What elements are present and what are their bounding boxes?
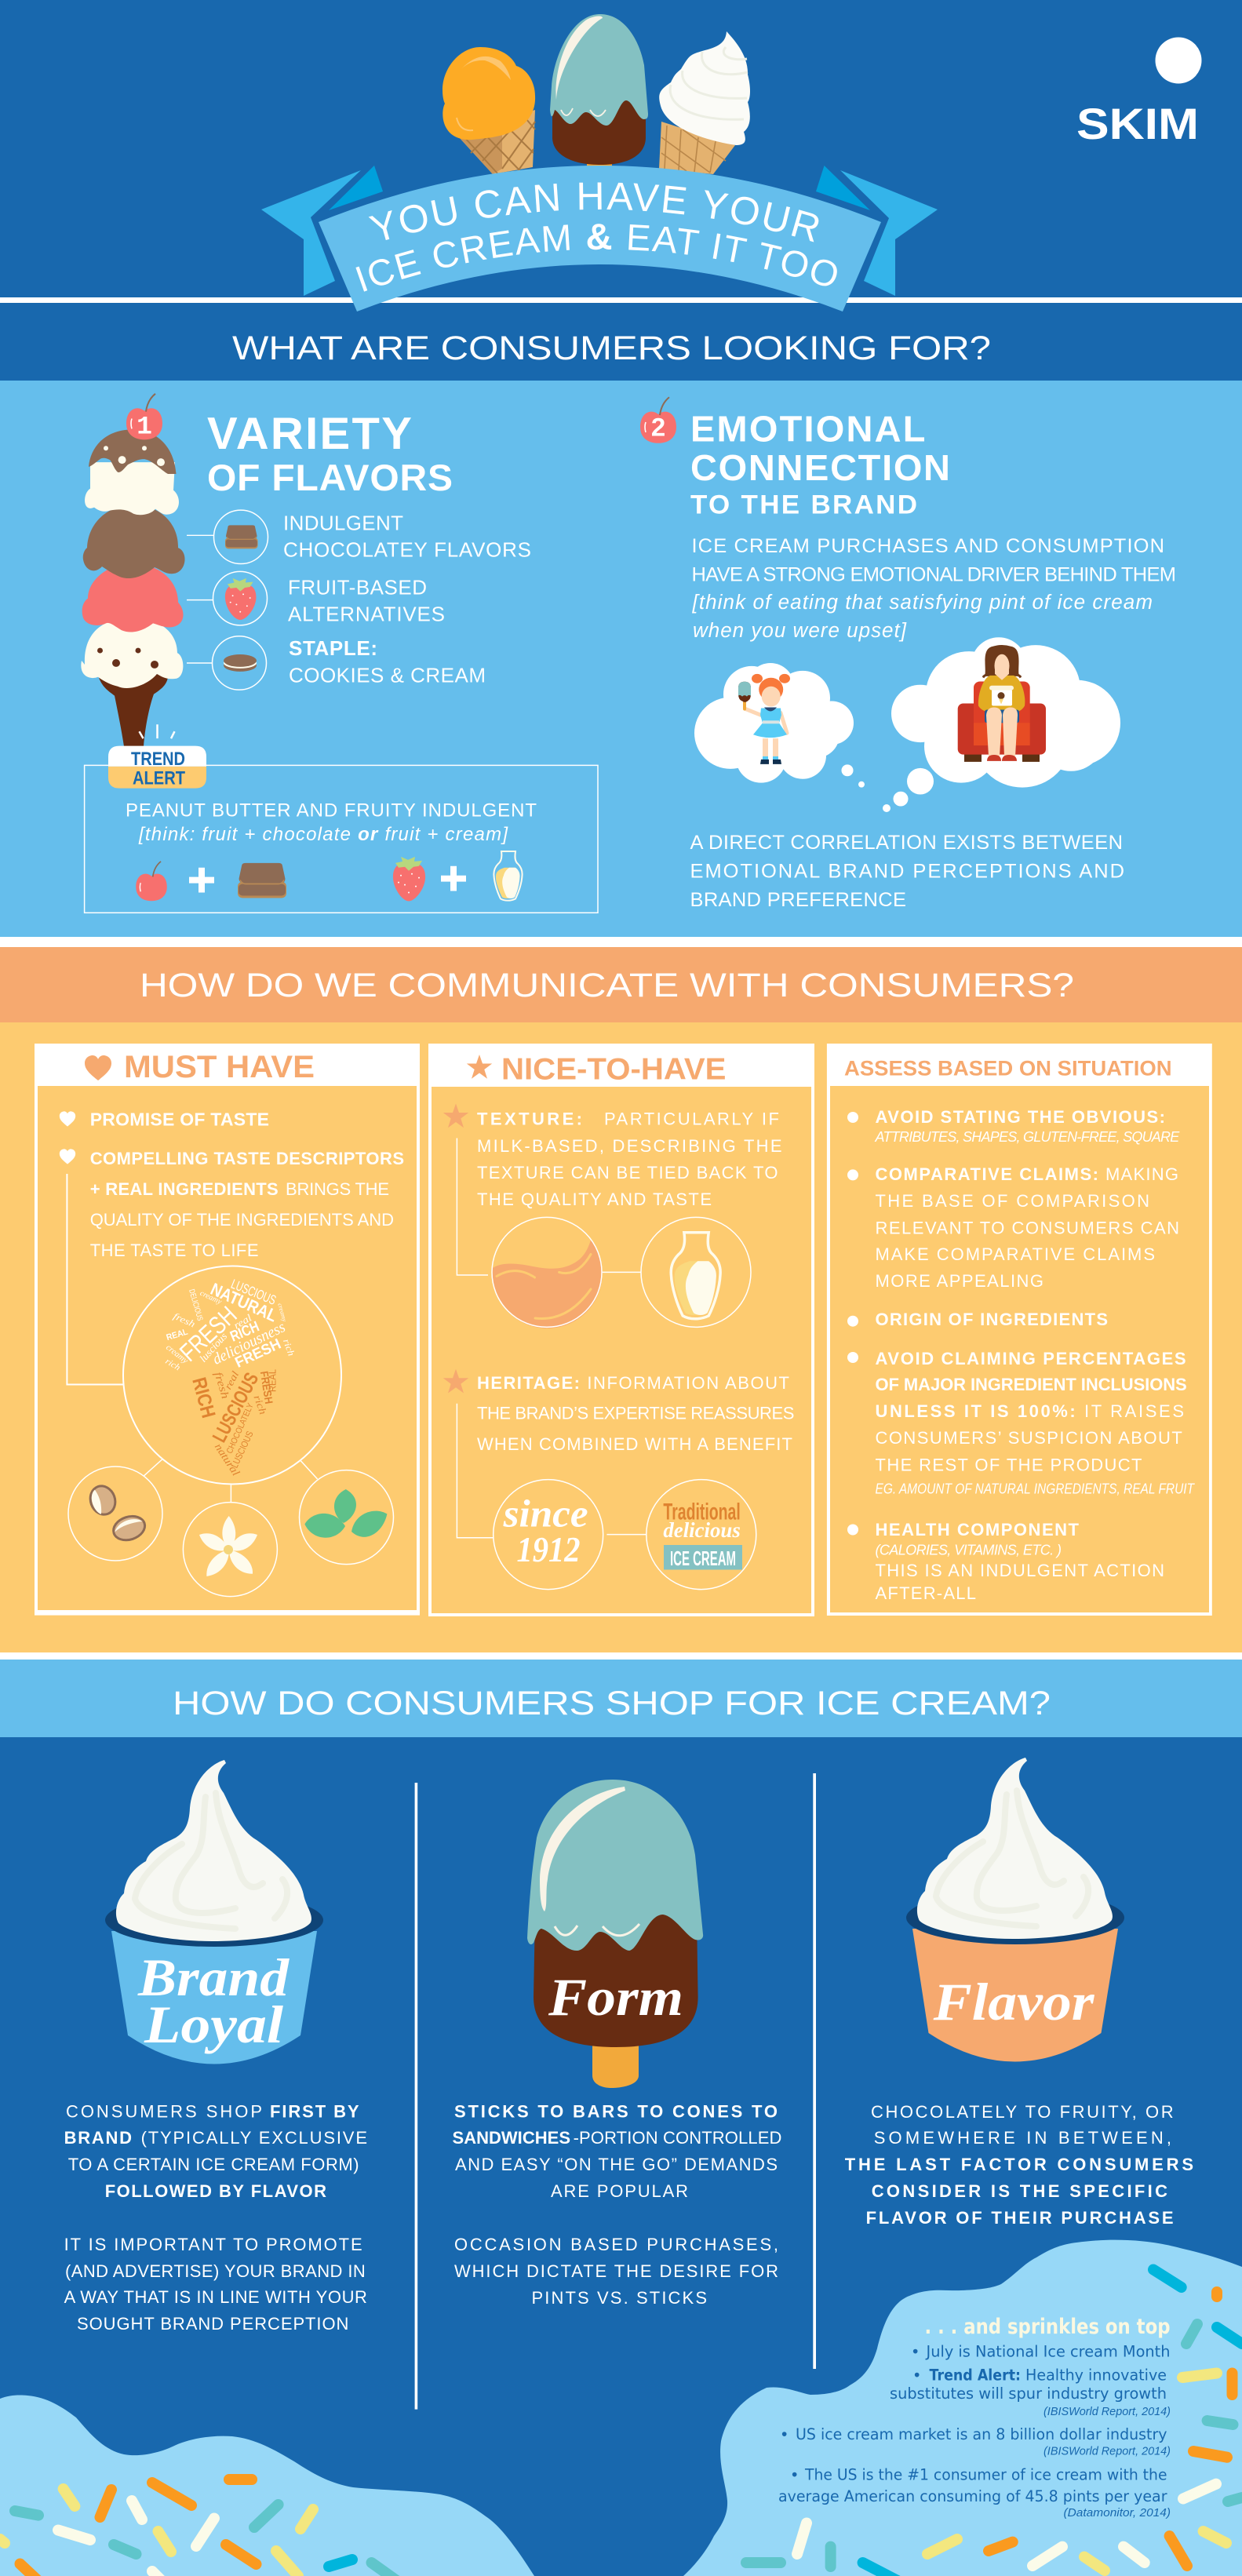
bullet list: taste promises: PROMISE OF TASTE	[90, 1109, 269, 1130]
word cloud cone: LUSCIOUS	[209, 1369, 263, 1446]
text block: texture: TEXTURE:	[477, 1109, 582, 1129]
bullet: health component: HEALTH COMPONENT	[876, 1520, 1080, 1539]
panel: must have	[35, 1044, 420, 1616]
text block: form	[452, 2101, 781, 2308]
item: fruit-based alternatives: FRUIT-BASED	[288, 578, 427, 599]
text block: form: PINTS VS. STICKS	[532, 2288, 707, 2308]
icon: mint leaves	[300, 1470, 394, 1565]
icon: flavor cup: Flavor	[933, 1972, 1094, 2031]
word cloud cone: creamy	[199, 1289, 223, 1306]
icon: creamy swirl circle	[492, 1217, 603, 1328]
icon: milk bottle circle	[641, 1217, 751, 1327]
heading: variety of flavors: VARIETY	[207, 409, 412, 459]
heading: assess based on situation: ASSESS BASED ON SITUATION	[844, 1056, 1172, 1080]
heading band: how do we communicate	[0, 947, 1242, 1022]
bullet: avoid claiming percentages: AVOID CLAIMING PERCENTAGES	[876, 1349, 1186, 1368]
icon: cherry number 1: 1	[137, 413, 152, 441]
text block: and sprinkles on top: Trend Alert:	[929, 2366, 1021, 2385]
callout: trend alert box: [think: fruit + chocolate or fruit + cream]	[138, 824, 508, 845]
word cloud cone: creamy	[276, 1303, 288, 1323]
word cloud cone: RICH	[228, 1318, 262, 1346]
icon: ice cream tower	[81, 394, 185, 746]
bullet: comparative claims: MORE APPEALING	[876, 1271, 1043, 1291]
bullet: avoid stating the obvious	[847, 1107, 1180, 1145]
item: fruit-based alternatives: ALTERNATIVES	[288, 603, 445, 625]
bullet: avoid claiming percentages	[847, 1349, 1196, 1497]
heading: emotional connection to the brand: TO THE BRAND	[690, 490, 917, 520]
text block: and sprinkles on top: US ice cream market is an 8 billion dollar industry	[796, 2425, 1167, 2443]
item: fruit-based alternatives	[187, 571, 445, 625]
text block: brand loyal	[64, 2101, 367, 2334]
icing blob: bottom left with sprinkles	[0, 2395, 534, 2576]
title banner ribbon: ICE CREAM & EAT IT TOO	[355, 224, 837, 292]
text block: and sprinkles on top: The US is the #1 consumer of ice cream with the	[804, 2465, 1167, 2483]
heading: nice-to-have: NICE-TO-HAVE	[501, 1053, 727, 1086]
text block: flavor	[845, 2102, 1193, 2228]
text block: brand loyal: (AND ADVERTISE) YOUR BRAND IN	[65, 2261, 366, 2281]
text block: brand loyal: (TYPICALLY EXCLUSIVE	[141, 2128, 367, 2148]
text block: brand loyal: IT IS IMPORTANT TO PROMOTE	[64, 2235, 362, 2254]
callout: trend alert box	[85, 724, 598, 913]
icon: cherry number 1	[126, 394, 162, 441]
word cloud cone: FRESH	[233, 1336, 284, 1372]
logo: SKIM: SKIM	[1076, 99, 1199, 148]
title banner ribbon	[261, 166, 938, 312]
text block: and sprinkles on top: average American consuming of 45.8 pints per year	[778, 2487, 1167, 2505]
text block: form: STICKS TO BARS TO CONES TO	[454, 2101, 778, 2121]
panel: yellow communicate section	[0, 1022, 1242, 1652]
icon: orange scoop cone	[443, 47, 535, 174]
dividers	[415, 1783, 417, 2410]
bullet list: taste promises: THE TASTE TO LIFE	[90, 1241, 259, 1260]
heading: must have: MUST HAVE	[124, 1050, 315, 1084]
icon: form popsicle: Form	[548, 1967, 683, 2027]
heading: emotional connection to the brand: CONNECTION	[690, 447, 950, 488]
word cloud cone: rich	[163, 1357, 182, 1373]
text block: direct correlation: BRAND PREFERENCE	[690, 889, 906, 911]
word cloud cone: LUSCIOUS	[229, 1277, 279, 1308]
word cloud cone: FRESH	[174, 1301, 242, 1367]
word cloud cone: REAL	[267, 1369, 279, 1392]
heading: emotional connection to the brand: EMOTIONAL	[690, 408, 925, 449]
text block: and sprinkles on top: •	[914, 2366, 920, 2385]
text block: texture: PARTICULARLY IF	[604, 1109, 779, 1129]
icon: coffee beans	[68, 1467, 162, 1561]
icon: vanilla flower	[183, 1503, 277, 1597]
bullet: avoid claiming percentages: EG. AMOUNT OF NATURAL INGREDIENTS, REAL FRUIT	[876, 1481, 1196, 1497]
word cloud cone: luscious	[197, 1330, 229, 1365]
text block: flavor: FLAVOR OF THEIR PURCHASE	[866, 2208, 1174, 2228]
text block: form: AND EASY “ON THE GO” DEMANDS	[455, 2155, 778, 2174]
icon: mint chocolate popsicle	[550, 14, 648, 167]
text block: emotional driver: HAVE A STRONG EMOTIONAL DRIVER BEHIND THEM	[691, 563, 1176, 585]
text block: and sprinkles on top: Healthy innovative	[1025, 2366, 1167, 2385]
bullet: avoid claiming percentages: CONSUMERS’ SUSPICION ABOUT	[876, 1428, 1182, 1448]
text block: texture: THE QUALITY AND TASTE	[477, 1190, 712, 1209]
item: staple cookies and cream: STAPLE:	[289, 638, 377, 660]
item: chocolatey flavors: CHOCOLATEY FLAVORS	[283, 540, 531, 562]
icon: woman in armchair with pint	[958, 645, 1046, 762]
text block: and sprinkles on top: substitutes will spur industry growth	[890, 2385, 1167, 2403]
badge: trend alert: ALERT	[133, 767, 185, 789]
text block: brand loyal: FOLLOWED BY FLAVOR	[105, 2181, 326, 2201]
word cloud cone: creamy	[164, 1343, 190, 1365]
bullet list: taste promises	[60, 1109, 404, 1260]
icon: cherry number 2	[640, 397, 676, 443]
text block: and sprinkles on top: . . . and sprinkles on top	[924, 2315, 1171, 2339]
text block: form: ARE POPULAR	[551, 2181, 688, 2201]
bullet: comparative claims	[847, 1164, 1179, 1291]
bullet: health component: (CALORIES, VITAMINS, ETC. )	[876, 1543, 1062, 1558]
bullet: comparative claims: THE BASE OF COMPARISON	[876, 1191, 1149, 1211]
bullet: avoid claiming percentages: OF MAJOR INGREDIENT INCLUSIONS	[876, 1375, 1187, 1394]
panel: nice-to-have	[428, 1044, 814, 1616]
word cloud cone: deliciousness	[210, 1318, 288, 1368]
text block: texture: MILK-BASED, DESCRIBING THE	[477, 1136, 781, 1156]
text block: brand loyal: BRAND	[64, 2128, 132, 2148]
heading band: how do we communicate: HOW DO WE COMMUNICATE WITH CONSUMERS?	[140, 967, 1074, 1004]
white gap	[0, 937, 1242, 947]
text block: direct correlation: EMOTIONAL BRAND PERCEPTIONS AND	[690, 861, 1124, 883]
icon: cherry number 2: 2	[651, 412, 665, 441]
icon: brand loyal cup	[105, 1760, 323, 2064]
bullet: comparative claims: MAKE COMPARATIVE CLAIMS	[876, 1244, 1155, 1264]
bullet: avoid stating the obvious: ATTRIBUTES, SHAPES, GLUTEN-FREE, SQUARE	[874, 1129, 1180, 1145]
word cloud cone: fresh	[172, 1310, 197, 1330]
icon: soft serve cone	[659, 31, 750, 174]
bullet list: taste promises: + REAL INGREDIENTS	[90, 1179, 279, 1199]
bullet: avoid claiming percentages: UNLESS IT IS 100%:	[876, 1401, 1076, 1421]
heading band: how do consumers shop: HOW DO CONSUMERS SHOP FOR ICE CREAM?	[173, 1685, 1051, 1722]
heading: what are consumers looking for: WHAT ARE CONSUMERS LOOKING FOR?	[232, 330, 991, 367]
icon: form popsicle	[527, 1780, 703, 2088]
bullet: health component	[847, 1520, 1164, 1603]
text block: brand loyal: CONSUMERS SHOP	[66, 2101, 262, 2121]
icon: flavor cup	[906, 1758, 1124, 2062]
bullet: origin of ingredients: ORIGIN OF INGREDIENTS	[876, 1310, 1108, 1329]
badge: trend alert	[108, 746, 206, 789]
text block: brand loyal: TO A CERTAIN ICE CREAM FORM)	[68, 2155, 359, 2174]
title text: YOU CAN HAVE YOUR	[369, 182, 819, 242]
bullet: health component: THIS IS AN INDULGENT ACTION	[876, 1561, 1164, 1580]
word cloud cone: rich	[251, 1394, 269, 1416]
icon: brand loyal cup: Loyal	[144, 1995, 283, 2054]
item: chocolatey flavors: INDULGENT	[283, 512, 403, 534]
text block: flavor: CONSIDER IS THE SPECIFIC	[872, 2181, 1167, 2201]
logo: SKIM	[1076, 38, 1202, 148]
panel: assess based on situation	[827, 1044, 1212, 1616]
word cloud cone: RICH	[188, 1375, 220, 1420]
icon: since 1912 circle: since	[503, 1491, 588, 1535]
icon: girl with popsicle	[738, 674, 790, 764]
text block: heritage: INFORMATION ABOUT	[587, 1373, 789, 1393]
badge: trend alert: TREND	[131, 749, 185, 770]
text block: and sprinkles on top: •	[781, 2425, 787, 2443]
text block: texture: TEXTURE CAN BE TIED BACK TO	[477, 1163, 778, 1182]
word cloud cone: CHOCOLATELY	[225, 1401, 256, 1456]
text block: emotional driver: ICE CREAM PURCHASES AND CONSUMPTION	[691, 535, 1164, 557]
text block: and sprinkles on top: July is National Ice cream Month	[925, 2342, 1171, 2360]
white gap	[0, 1652, 1242, 1660]
item: staple cookies and cream: COOKIES & CREAM	[289, 665, 486, 687]
item: chocolatey flavors	[187, 510, 531, 564]
text block: and sprinkles on top: •	[912, 2342, 918, 2360]
text block: texture	[443, 1103, 781, 1209]
bullet list: taste promises: QUALITY OF THE INGREDIENTS AND	[90, 1210, 394, 1230]
heading: variety of flavors	[207, 409, 453, 499]
icon: traditional delicious ice cream circle	[646, 1480, 756, 1590]
text block: direct correlation	[690, 832, 1124, 911]
word cloud cone: real	[222, 1368, 241, 1391]
word cloud cone: DELICIOUS	[187, 1288, 204, 1322]
bullet: comparative claims: MAKING	[1105, 1164, 1178, 1184]
heading band: how do consumers shop	[0, 1660, 1242, 1737]
text block: brand loyal: A WAY THAT IS IN LINE WITH YOUR	[64, 2287, 367, 2307]
icon: since 1912 circle: 1912	[516, 1529, 581, 1569]
bullet: avoid claiming percentages: THE REST OF THE PRODUCT	[876, 1455, 1142, 1475]
word cloud cone: FRESH	[258, 1370, 275, 1405]
text block: form: OCCASION BASED PURCHASES,	[454, 2235, 778, 2254]
icon: cherry plus chocolate	[136, 862, 286, 901]
word cloud cone: real	[231, 1311, 254, 1332]
word cloud cone	[123, 1266, 341, 1485]
heading: variety of flavors: OF FLAVORS	[207, 457, 453, 499]
panel: light blue consumer section	[0, 381, 1242, 937]
icon: traditional delicious ice cream circle: Traditional	[663, 1499, 741, 1525]
bullet: avoid claiming percentages: IT RAISES	[1084, 1401, 1184, 1421]
text block: and sprinkles on top: (Datamonitor, 2014)	[1064, 2507, 1171, 2520]
word cloud cone: natural	[212, 1441, 242, 1478]
bullet: avoid stating the obvious: AVOID STATING THE OBVIOUS:	[876, 1107, 1165, 1127]
text block: heritage: THE BRAND’S EXPERTISE REASSURES	[477, 1404, 794, 1423]
thought cloud: girl memory	[694, 663, 865, 788]
text block: emotional driver: [think of eating that satisfying pint of ice cream	[691, 592, 1153, 614]
text block: form: -PORTION CONTROLLED	[574, 2128, 781, 2148]
text block: brand loyal: FIRST BY	[270, 2101, 359, 2121]
bullet list: taste promises: COMPELLING TASTE DESCRIPTORS	[90, 1149, 404, 1168]
text block: form: SANDWICHES	[452, 2128, 570, 2148]
bullet list: taste promises: BRINGS THE	[286, 1179, 389, 1199]
text block: and sprinkles on top: (IBISWorld Report, 2014)	[1043, 2406, 1171, 2418]
word cloud cone: REAL	[166, 1327, 189, 1343]
bullet: health component: AFTER-ALL	[876, 1583, 976, 1603]
text block: and sprinkles on top: •	[792, 2465, 797, 2483]
item: staple cookies and cream	[187, 636, 486, 690]
word cloud cone: rich	[281, 1338, 297, 1357]
word cloud cone: LUSCIOUS	[229, 1430, 256, 1470]
header rule	[0, 297, 1242, 303]
bullet: comparative claims: COMPARATIVE CLAIMS:	[876, 1164, 1098, 1184]
text block: direct correlation: A DIRECT CORRELATION EXISTS BETWEEN	[690, 832, 1123, 854]
bullet: comparative claims: RELEVANT TO CONSUMERS CAN	[876, 1218, 1179, 1237]
text block: heritage: HERITAGE:	[477, 1373, 580, 1393]
section content: what consumers look for	[81, 394, 1176, 913]
icon: traditional delicious ice cream circle: delicious	[663, 1518, 741, 1542]
word cloud cone: NATURAL	[208, 1279, 280, 1325]
text block: flavor: SOMEWHERE IN BETWEEN,	[874, 2128, 1171, 2148]
text block: brand loyal: SOUGHT BRAND PERCEPTION	[77, 2314, 348, 2334]
text block: emotional driver	[691, 535, 1176, 642]
text block: and sprinkles on top: (IBISWorld Report, 2014)	[1043, 2446, 1171, 2458]
text block: flavor: THE LAST FACTOR CONSUMERS	[845, 2155, 1193, 2174]
icing blob: bottom right with sprinkles	[683, 2240, 1242, 2576]
text block: flavor: CHOCOLATELY TO FRUITY, OR	[871, 2102, 1174, 2122]
thought cloud: woman memory	[883, 637, 1120, 812]
text block: heritage: WHEN COMBINED WITH A BENEFIT	[477, 1434, 792, 1454]
word cloud cone: fresh	[211, 1371, 231, 1401]
heading: emotional connection to the brand	[690, 408, 950, 520]
text block: emotional driver: when you were upset]	[693, 620, 907, 642]
text block: and sprinkles on top	[778, 2315, 1171, 2520]
icon: since 1912 circle	[494, 1480, 603, 1590]
text block: form: WHICH DICTATE THE DESIRE FOR	[454, 2261, 778, 2281]
text block: heritage	[443, 1369, 794, 1454]
callout: trend alert box: PEANUT BUTTER AND FRUITY INDULGENT	[126, 800, 537, 821]
icon: brand loyal cup: Brand	[137, 1947, 290, 2007]
icon: strawberry plus cream	[393, 851, 523, 901]
icon: traditional delicious ice cream circle: ICE CREAM	[670, 1547, 736, 1570]
